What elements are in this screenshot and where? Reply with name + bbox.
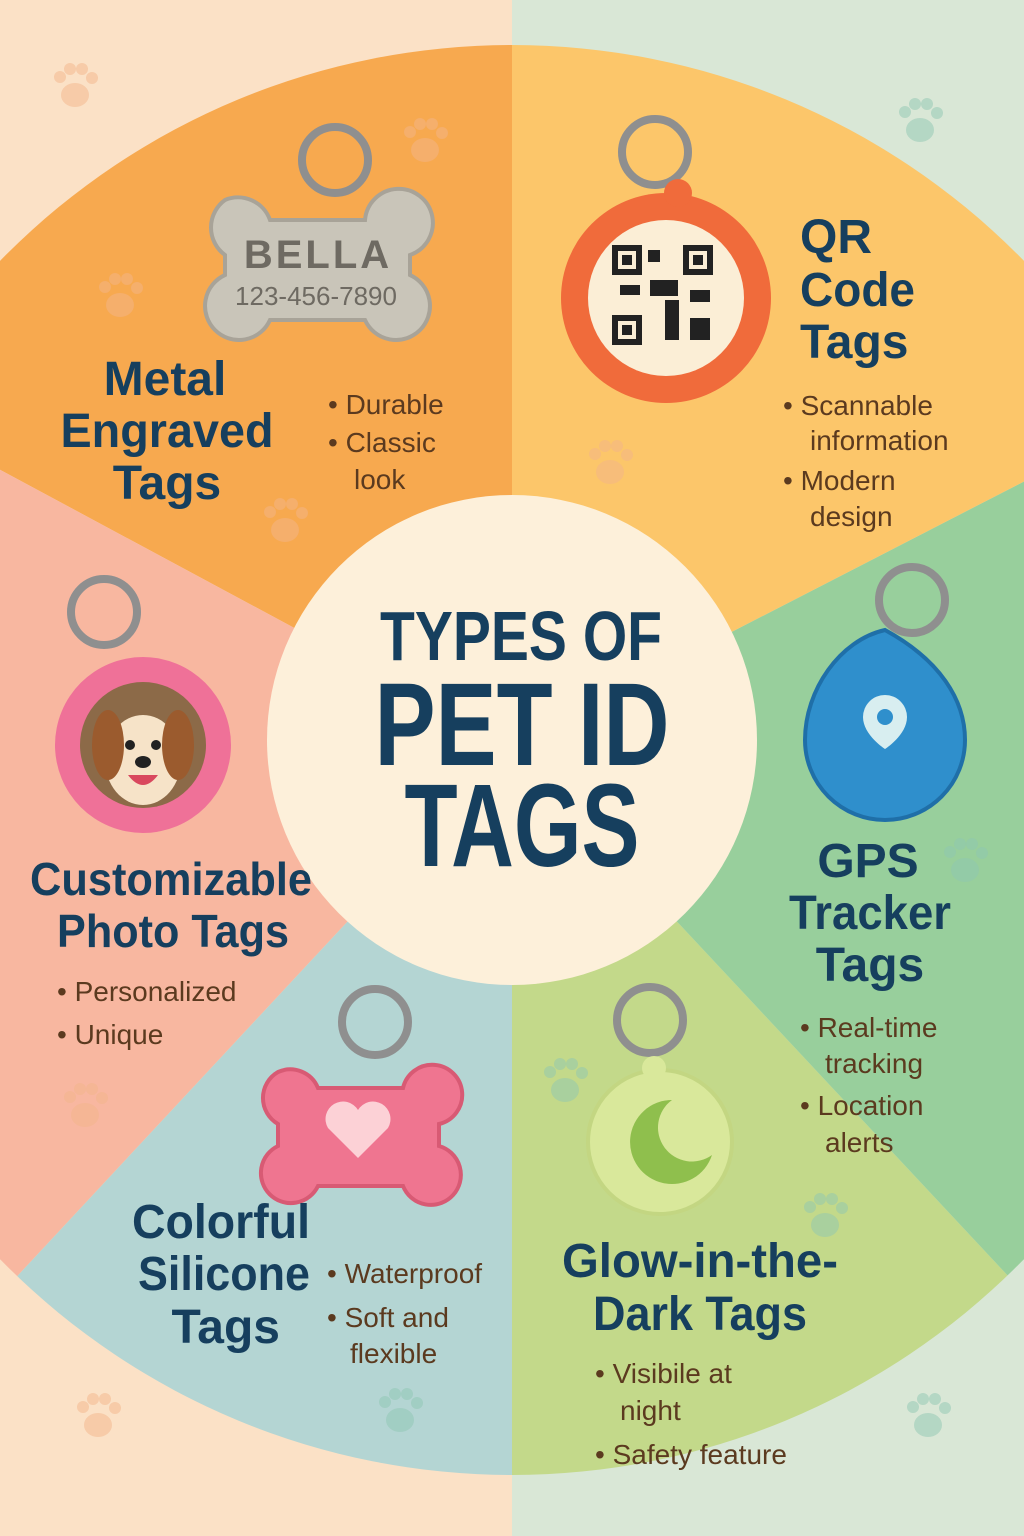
heading: GPS: Tracker (789, 887, 951, 940)
heading: silicone: Colorful (132, 1196, 310, 1249)
bullets: GPS: tracking (825, 1048, 923, 1079)
icon: metal bone tag: BELLA (244, 233, 392, 277)
bullets: silicone: • Soft and (327, 1302, 449, 1333)
heading: metal engraved: Engraved (60, 405, 274, 458)
bullets: GPS (800, 1012, 937, 1158)
heading: photo: Photo Tags (57, 905, 289, 957)
heading: QR code: QR (800, 211, 872, 264)
icon: GPS tag (805, 567, 965, 820)
bullets: GPS: • Real-time (800, 1012, 937, 1043)
heading: photo: Customizable (30, 853, 312, 905)
heading: metal engraved: Tags (113, 457, 221, 510)
heading: QR code (800, 211, 915, 369)
heading: GPS (789, 835, 951, 992)
bullets: glow: • Visibile at (595, 1358, 732, 1389)
icon: silicone bone (261, 989, 462, 1205)
bullets: metal (328, 389, 444, 495)
heading: GPS: GPS (817, 835, 919, 888)
heading: silicone: Silicone (138, 1248, 310, 1301)
bullets: silicone: • Waterproof (327, 1258, 482, 1289)
bullets: glow (595, 1358, 787, 1470)
heading: silicone: Tags (172, 1301, 280, 1354)
heading: glow (562, 1235, 838, 1341)
bullets: photo (57, 976, 236, 1050)
bullets: silicone (327, 1258, 482, 1369)
bullets: glow: night (620, 1395, 681, 1426)
bullets: GPS: • Location (800, 1090, 923, 1121)
heading: QR code: Tags (800, 316, 908, 369)
heading: glow: Glow-in-the- (562, 1235, 838, 1288)
bullets: photo: • Personalized (57, 976, 236, 1007)
heading: QR code: Code (800, 264, 915, 317)
icon: photo tag (55, 579, 231, 833)
bullets: silicone: flexible (350, 1338, 437, 1369)
center circle (267, 495, 757, 985)
heading: silicone (132, 1196, 310, 1354)
bullets: metal: • Classic (328, 427, 436, 458)
bullets: QR: • Scannable (783, 390, 933, 421)
heading: glow: Dark Tags (593, 1288, 807, 1341)
title: PET ID (374, 659, 670, 791)
heading: GPS: Tags (816, 939, 924, 992)
title: TAGS (404, 760, 640, 892)
bullets: QR: design (810, 501, 893, 532)
heading: photo (30, 853, 312, 957)
bullets: photo: • Unique (57, 1019, 163, 1050)
bullets: metal: • Durable (328, 389, 444, 420)
icon: metal bone tag (205, 127, 433, 340)
icon: glow tag (588, 987, 732, 1214)
heading: metal engraved (60, 353, 274, 510)
bullets: GPS: alerts (825, 1127, 893, 1158)
heading: metal engraved: Metal (104, 353, 226, 406)
icon: QR tag (561, 119, 771, 403)
title: TYPES OF (380, 597, 662, 675)
bullets: QR: • Modern (783, 465, 896, 496)
bullets: QR: information (810, 425, 949, 456)
title (374, 597, 670, 892)
bullets: QR (783, 390, 949, 532)
bullets: metal: look (354, 464, 406, 495)
icon: metal bone tag: 123-456-7890 (235, 281, 397, 311)
bullets: glow: • Safety feature (595, 1439, 787, 1470)
